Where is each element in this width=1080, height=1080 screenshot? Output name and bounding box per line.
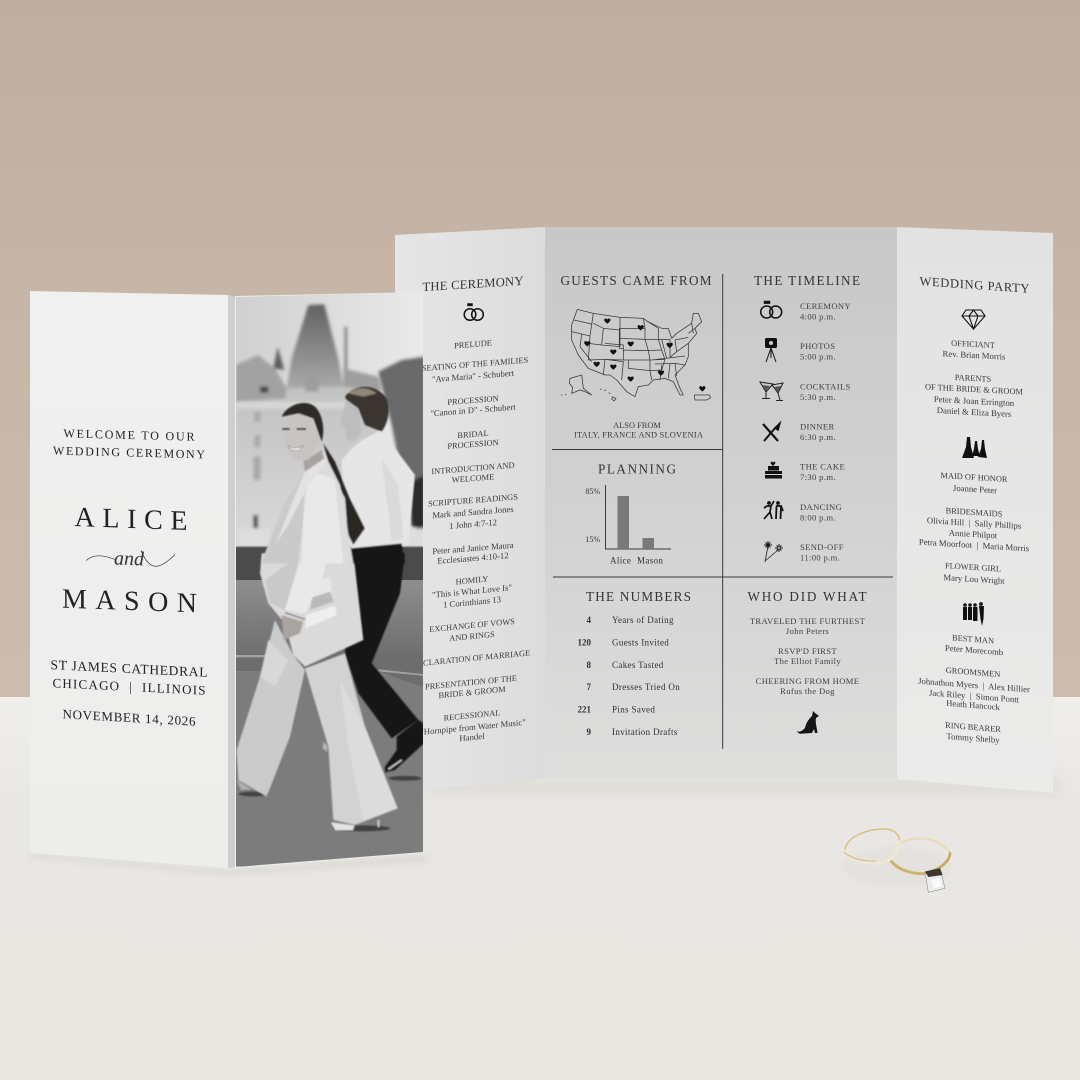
map caption: ITALY, FRANCE AND SLOVENIA [574,430,703,440]
photo lower half backdrop [232,553,432,867]
timeline labels: 4:00 p.m. [800,312,836,322]
bridesmaids text: Annie Philpot [949,527,998,540]
dark wall top [236,546,423,580]
icon: wedding rings [464,304,483,320]
program list: "Canon in D" - Schubert [430,402,516,418]
section: the numbers: 8 [586,660,592,670]
section: the numbers [578,589,691,737]
figures upper half [262,387,415,563]
Alaska and Hawaii [561,375,616,401]
section: the numbers: 4 [586,615,592,625]
section: the numbers: Guests Invited [612,638,669,648]
woman [262,403,365,563]
section: the numbers: Pins Saved [612,704,655,714]
bridesmaids text: Petra Moorfoot | Maria Morris [919,537,1030,553]
program list: PRELUDE [454,339,492,350]
icon: groomsmen [963,602,984,626]
icon: fork and knife [763,423,780,441]
program list: PROCESSION [447,394,499,407]
heading: the ceremony: THE CEREMONY [422,274,524,294]
section: the numbers: Dresses Tried On [612,682,680,692]
stone wall [232,580,432,657]
blurred chateau and tree [236,304,425,552]
officiant and parents: PARENTS [955,373,992,384]
officiant and parents [925,337,1024,420]
timeline labels: 5:00 p.m. [800,352,836,362]
program list: BRIDAL [457,429,489,440]
program list continued: DECLARATION OF MARRIAGE [412,648,530,669]
divider lines [552,274,893,749]
section: the numbers: Cakes Tasted [612,660,664,670]
venue text: ST JAMES CATHEDRAL [51,657,207,680]
program list: INTRODUCTION AND [431,461,515,476]
heading: planning: PLANNING [598,462,676,476]
eyes and smile [281,427,307,431]
program list continued: PRESENTATION OF THE [425,674,517,692]
program list continued: "This is What Love Is" [432,582,512,600]
section: the timeline: THE TIMELINE [754,273,860,288]
hair [282,403,323,442]
section: the numbers: 7 [586,682,592,692]
neck [303,450,324,472]
couple names: MASON [62,584,197,619]
front cover: gap between folds [228,295,236,868]
section: the timeline [754,273,860,562]
program list continued: RECESSIONAL [444,708,500,723]
timeline labels: SEND-OFF [800,542,844,552]
icon: diamond [962,310,985,329]
front cover: photo of the couple [232,285,432,868]
panel: centre spread [545,227,897,779]
program list: SCRIPTURE READINGS [428,492,518,509]
bridesmaids text: MAID OF HONOR [941,471,1008,484]
timeline labels: 11:00 p.m. [800,552,840,562]
officiant and parents: Peter & Joan Errington [934,394,1015,408]
sky [236,293,402,545]
diamond stone [925,868,945,892]
timeline labels: 8:00 p.m. [800,512,836,522]
man [340,387,415,563]
ring: engagement band [892,839,950,874]
timeline labels: THE CAKE [800,462,845,472]
timeline labels: COCKTAILS [800,382,851,392]
ponytail [323,443,365,545]
timeline labels: 5:30 p.m. [800,392,836,402]
groomsmen text: Tommy Shelby [946,731,1000,745]
bridesmaids text: Olivia Hill | Sally Phillips [927,515,1022,531]
map caption: ALSO FROM [613,421,661,430]
map: United States with hearts [561,309,711,401]
front cover: left panel [30,291,229,868]
program list: Mark and Sandra Jones [432,504,514,520]
timeline labels: DINNER [800,422,835,432]
program list [422,336,528,567]
cover welcome text [53,426,205,461]
section: the numbers: Years of Dating [612,615,674,625]
section: the numbers: 9 [586,727,592,737]
section: the numbers: Invitation Drafts [612,727,678,737]
section: who did what: The Elliot Family [774,656,841,666]
section: who did what: CHEERING FROM HOME [756,676,859,686]
bridesmaids text [919,470,1030,587]
soft shadow under front card [30,853,430,876]
timeline labels: DANCING [800,502,842,512]
program list: 1 John 4:7-12 [449,517,497,531]
icon: bridesmaids [962,437,987,458]
photo upper half [236,293,423,580]
cover welcome text: WELCOME TO OUR [64,426,195,444]
bar chart: planning share: Alice [610,556,631,566]
section: who did what: WHO DID WHAT [748,589,866,604]
icon: tiered cake [765,462,782,478]
venue text [51,657,208,698]
face [282,413,320,460]
bar chart: planning share [585,485,671,566]
section: who did what: TRAVELED THE FURTHEST [750,616,866,626]
program list: Ecclesiastes 4:10-12 [437,550,509,566]
section: who did what: John Peters [786,626,829,636]
program list: WELCOME [452,472,494,485]
map outline and state lines [572,309,702,397]
cover welcome text: WEDDING CEREMONY [53,444,205,461]
ring: plain band [844,829,899,863]
script word and: and [114,547,145,571]
wedding rings on table [842,829,952,892]
program list: "Ava Maria" - Schubert [432,368,515,384]
bar chart: planning share: 15% [585,535,600,544]
program list continued: 1 Corinthians 13 [443,594,502,610]
bar chart: planning share: 85% [585,487,600,496]
icon: cocktails [760,382,783,400]
couple names [62,502,197,619]
icon: sitting dog [797,711,819,734]
timeline labels: PHOTOS [800,341,835,351]
program list continued: HOMILY [456,574,488,587]
bridesmaids text: BRIDESMAIDS [946,506,1003,519]
panel: left wing, the ceremony [395,227,545,792]
program list continued: Handel [459,731,485,743]
woman's trousers and lower jacket [237,553,398,831]
officiant and parents: Daniel & Eliza Byers [937,405,1012,419]
state hearts [584,318,705,391]
groomsmen text: Johnathon Myers | Alex Hillier [918,676,1030,694]
groomsmen text: Peter Morecomb [945,643,1004,657]
program list continued: AND RINGS [449,630,495,643]
timeline labels [800,301,851,562]
timeline labels: 6:30 p.m. [800,432,836,442]
groomsmen text: Jack Riley | Simon Pontt [929,687,1020,705]
program list: Peter and Janice Maura [432,540,514,556]
icon: dancing couple [764,501,783,519]
section: the numbers: 120 [578,638,592,648]
officiant and parents: OF THE BRIDE & GROOM [925,382,1024,397]
timeline labels: CEREMONY [800,301,851,311]
road [232,672,432,867]
background wall [0,0,1080,698]
program list continued: EXCHANGE OF VOWS [429,617,515,634]
hand [282,615,303,640]
foot shadows [238,776,422,831]
section: the numbers: 221 [578,704,592,714]
program list continued: "Hornpipe from Water Music" [420,717,526,737]
jacket upper [298,453,354,564]
Puerto Rico [694,395,711,400]
heading: guests came from: GUESTS CAME FROM [560,273,712,288]
groomsmen text: Heath Hancock [946,698,1001,712]
timeline labels: 7:30 p.m. [800,472,836,482]
bridesmaids text: Joanne Peter [953,483,997,495]
venue text: CHICAGO | ILLINOIS [52,675,206,698]
officiant and parents: Rev. Brian Morris [943,348,1006,362]
jacket hem [260,553,363,667]
table surface [0,697,1080,1080]
panel: right wing, wedding party [897,227,1053,793]
groomsmen text [918,631,1030,747]
section: who did what: RSVP'D FIRST [778,646,837,656]
bridesmaids text: FLOWER GIRL [945,561,1001,574]
date text: NOVEMBER 14, 2026 [63,706,196,729]
groomsmen text: BEST MAN [952,633,994,646]
open program: back card [395,227,1053,793]
man's trousers and shoes [322,553,424,772]
section: the numbers: THE NUMBERS [586,589,691,604]
soft shadow under back card [430,778,1060,794]
groomsmen text: RING BEARER [945,721,1001,734]
heading: wedding party: WEDDING PARTY [920,274,1029,296]
icon: camera on tripod [765,338,777,362]
officiant and parents: OFFICIANT [951,339,995,350]
section: who did what [748,589,866,734]
bar chart: planning share: Mason [637,556,663,566]
wall ledge [236,656,423,687]
couple names: ALICE [74,502,187,537]
program list: SEATING OF THE FAMILIES [422,356,528,373]
program list continued [412,570,530,748]
bridesmaids text: Mary Lou Wright [943,572,1005,586]
groomsmen text: GROOMSMEN [946,666,1000,679]
map caption [574,421,703,440]
icon: rings [761,301,782,318]
section: who did what: Rufus the Dog [780,686,835,696]
icon: sparklers [764,541,783,562]
program list continued: BRIDE & GROOM [438,685,506,700]
program list: PROCESSION [447,438,499,451]
